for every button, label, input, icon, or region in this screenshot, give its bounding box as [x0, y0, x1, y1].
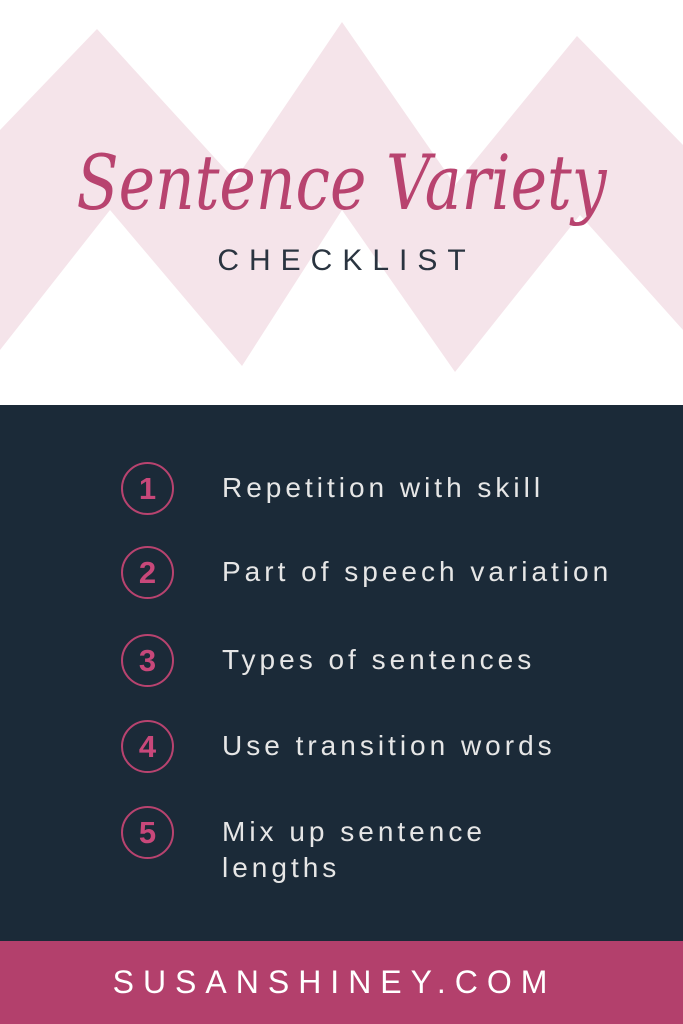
- item 4: [121, 720, 556, 773]
- footer: [0, 941, 683, 1024]
- item 1: [121, 462, 544, 515]
- item 5: lengths: [222, 852, 340, 883]
- title: Sentence Variety: [76, 138, 607, 227]
- subtitle: CHECKLIST: [217, 244, 476, 277]
- panel: checklist: [0, 405, 683, 941]
- item 2: [121, 546, 612, 599]
- item 5: Mix up sentence: [222, 816, 486, 847]
- background zigzag: [0, 22, 683, 372]
- item 2: Part of speech variation: [222, 556, 612, 587]
- item 5: 5: [139, 815, 156, 850]
- item 5: [121, 806, 486, 883]
- item 1: 1: [139, 471, 156, 506]
- item 3: 3: [139, 643, 156, 678]
- item 4: Use transition words: [222, 730, 556, 761]
- item 3: [121, 634, 535, 687]
- item 2: 2: [139, 555, 156, 590]
- item 3: Types of sentences: [222, 644, 535, 675]
- footer: SUSANSHINEY.COM: [113, 964, 556, 1000]
- item 1: Repetition with skill: [222, 472, 544, 503]
- item 4: 4: [139, 729, 156, 764]
